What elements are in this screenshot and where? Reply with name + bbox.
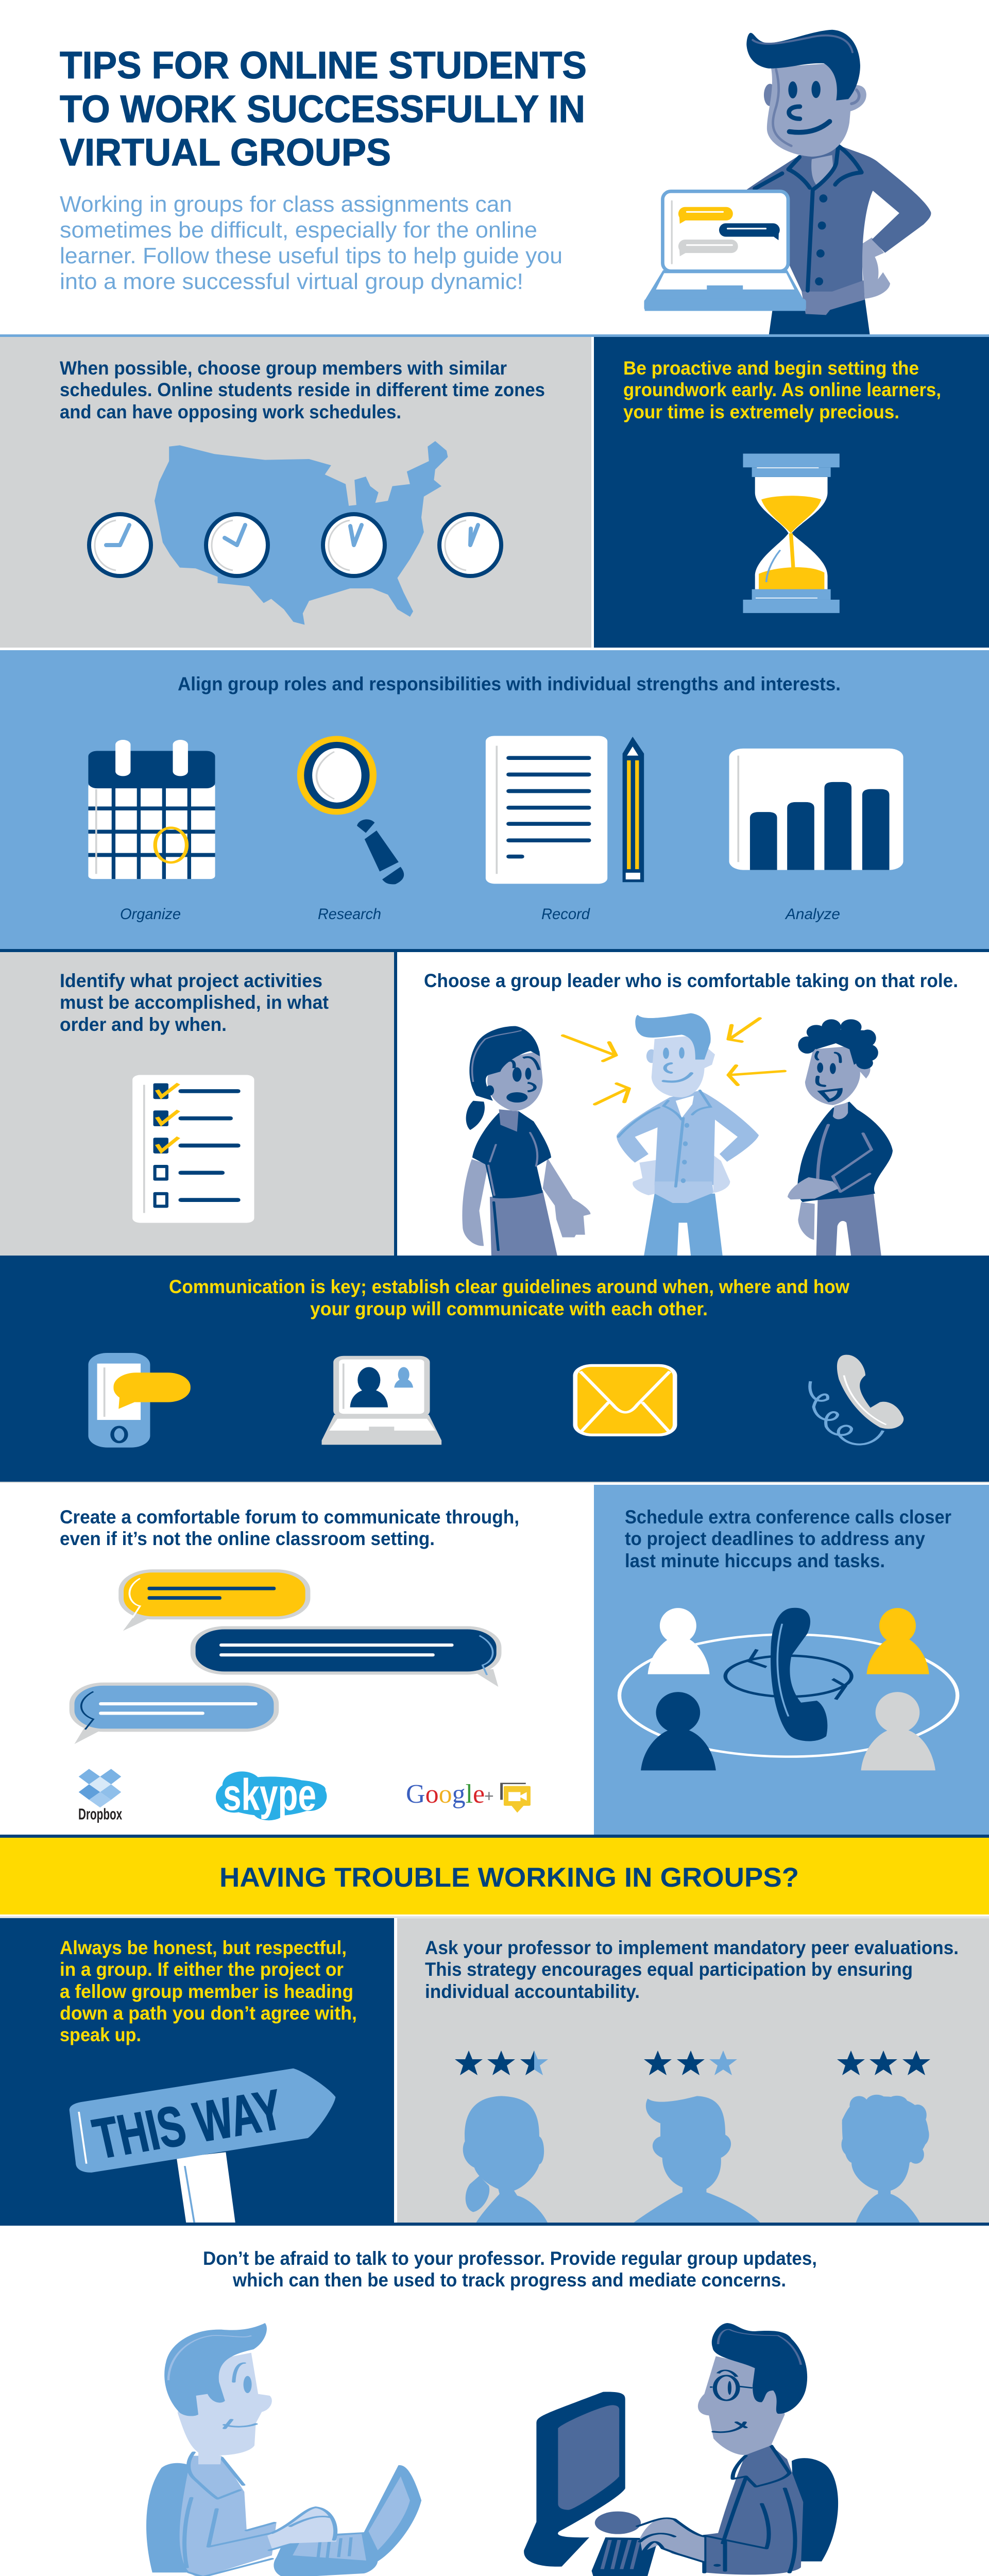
- activities text: Identify what project activities: [60, 970, 322, 991]
- divider line: [0, 334, 989, 337]
- role labels: Record: [541, 906, 590, 923]
- icon: document and pencil: [486, 736, 644, 884]
- conference text: to project deadlines to address any: [625, 1528, 925, 1549]
- schedules text: schedules. Online students reside in different time zones: [60, 379, 545, 400]
- conference text: Schedule extra conference calls closer: [625, 1506, 951, 1528]
- panel: peer evaluations: [397, 1918, 989, 2223]
- panel: header: [0, 0, 989, 334]
- logo: Google+ Hangouts: +: [484, 1787, 494, 1805]
- leader text: Choose a group leader who is comfortable taking on that role.: [424, 970, 958, 991]
- icon: laptop video call: [321, 1358, 441, 1445]
- icon: magnifying glass: [297, 736, 404, 884]
- schedules text: When possible, choose group members with similar: [60, 358, 507, 379]
- icon: bar chart: [729, 749, 903, 870]
- illustration: professor at desktop: [524, 2323, 838, 2576]
- icon: conference call circle: [619, 1608, 958, 1770]
- schedules text: and can have opposing work schedules.: [60, 401, 401, 422]
- icon: this way signpost: THIS WAY: [88, 2078, 288, 2171]
- communication text: Communication is key; establish clear guidelines around when, where and how: [169, 1276, 849, 1297]
- proactive text: [623, 358, 941, 422]
- activities text: must be accomplished, in what: [60, 992, 329, 1013]
- panel: be proactive: [594, 337, 989, 648]
- proactive text: groundwork early. As online learners,: [623, 379, 941, 400]
- icon: map of the United States: [155, 441, 448, 625]
- illustration: man with curly hair: [788, 1019, 893, 1256]
- activities text: [60, 970, 329, 1035]
- role labels: Organize: [120, 906, 181, 923]
- title: TO WORK SUCCESSFULLY IN: [60, 88, 585, 130]
- activities text: order and by when.: [60, 1014, 227, 1035]
- professor text: which can then be used to track progress and mediate concerns.: [232, 2269, 786, 2291]
- honest text: [60, 1937, 357, 2045]
- icon: hourglass: [743, 453, 840, 613]
- icon: clock 4: [439, 514, 501, 576]
- silhouettes of group members: [463, 2095, 929, 2223]
- logo: Dropbox: Dropbox: [78, 1806, 122, 1823]
- icon: checklist: [132, 1075, 254, 1223]
- panel: be honest: [0, 1918, 394, 2223]
- icon: telephone handset: [810, 1355, 903, 1445]
- panel: similar schedules: [0, 337, 591, 648]
- honest text: in a group. If either the project or: [60, 1959, 344, 1980]
- panel: talk to your professor: [0, 2226, 989, 2576]
- communication text: [169, 1276, 849, 1319]
- conference text: last minute hiccups and tasks.: [625, 1550, 885, 1571]
- intro text: into a more successful virtual group dynamic!: [60, 269, 523, 294]
- title: [60, 44, 587, 174]
- role labels: [120, 906, 840, 923]
- illustration: leader with arrows: [563, 1013, 785, 1256]
- communication text: your group will communicate with each other.: [310, 1298, 708, 1319]
- evaluations text: This strategy encourages equal participation by ensuring: [425, 1959, 913, 1980]
- icon: calendar: [88, 740, 215, 879]
- honest text: Always be honest, but respectful,: [60, 1937, 347, 1958]
- honest text: down a path you don’t agree with,: [60, 2003, 357, 2024]
- panel: communication: [0, 1256, 989, 1482]
- professor text: Don’t be afraid to talk to your professor. Provide regular group updates,: [203, 2248, 817, 2269]
- proactive text: your time is extremely precious.: [623, 401, 899, 422]
- icon: smartphone: [88, 1353, 191, 1448]
- evaluations text: Ask your professor to implement mandatory peer evaluations.: [425, 1937, 959, 1958]
- chat bubbles: [72, 1571, 499, 1744]
- forum text: Create a comfortable forum to communicate through,: [60, 1506, 519, 1528]
- icon: this way signpost: [70, 2069, 335, 2223]
- logo: Google+ Hangouts: Google: [406, 1780, 485, 1809]
- banner: having trouble: HAVING TROUBLE WORKING IN GROUPS?: [219, 1862, 799, 1893]
- star ratings: [455, 2050, 930, 2075]
- panel: group roles: [0, 650, 989, 949]
- logo: Skype: skype: [223, 1770, 316, 1820]
- evaluations text: [425, 1937, 959, 2002]
- panel: group leader: [397, 952, 989, 1256]
- banner: having trouble: [0, 1838, 989, 1914]
- icon: envelope: [575, 1365, 675, 1435]
- logo: Google+ Hangouts: [406, 1780, 531, 1812]
- title: VIRTUAL GROUPS: [60, 131, 391, 174]
- honest text: a fellow group member is heading: [60, 1981, 353, 2002]
- illustration: woman: [462, 1026, 590, 1256]
- role labels: Analyze: [785, 906, 840, 923]
- title: TIPS FOR ONLINE STUDENTS: [60, 44, 587, 87]
- conference text: [625, 1506, 951, 1571]
- honest text: speak up.: [60, 2024, 141, 2045]
- intro text: Working in groups for class assignments can: [60, 192, 512, 217]
- schedules text: [60, 358, 545, 422]
- professor text: [203, 2248, 817, 2291]
- forum text: even if it’s not the online classroom setting.: [60, 1528, 435, 1549]
- panel: comfortable forum: [0, 1485, 594, 1835]
- illustration: student at laptop: [146, 2323, 421, 2576]
- intro text: learner. Follow these useful tips to help guide you: [60, 243, 562, 268]
- forum text: [60, 1506, 519, 1549]
- logo: Dropbox: [78, 1769, 122, 1823]
- role labels: Research: [318, 906, 381, 923]
- panel: project activities: [0, 952, 394, 1256]
- icon: clock 2: [206, 514, 268, 576]
- icon: clock 1: [89, 514, 151, 576]
- intro text: sometimes be difficult, especially for the online: [60, 217, 537, 243]
- illustration: student holding laptop: [644, 30, 931, 334]
- proactive text: Be proactive and begin setting the: [623, 358, 919, 379]
- panel: conference calls: [594, 1485, 989, 1835]
- icon: clock 3: [323, 514, 385, 576]
- evaluations text: individual accountability.: [425, 1981, 640, 2002]
- intro text: [60, 192, 562, 294]
- roles text: Align group roles and responsibilities with individual strengths and interests.: [178, 673, 841, 694]
